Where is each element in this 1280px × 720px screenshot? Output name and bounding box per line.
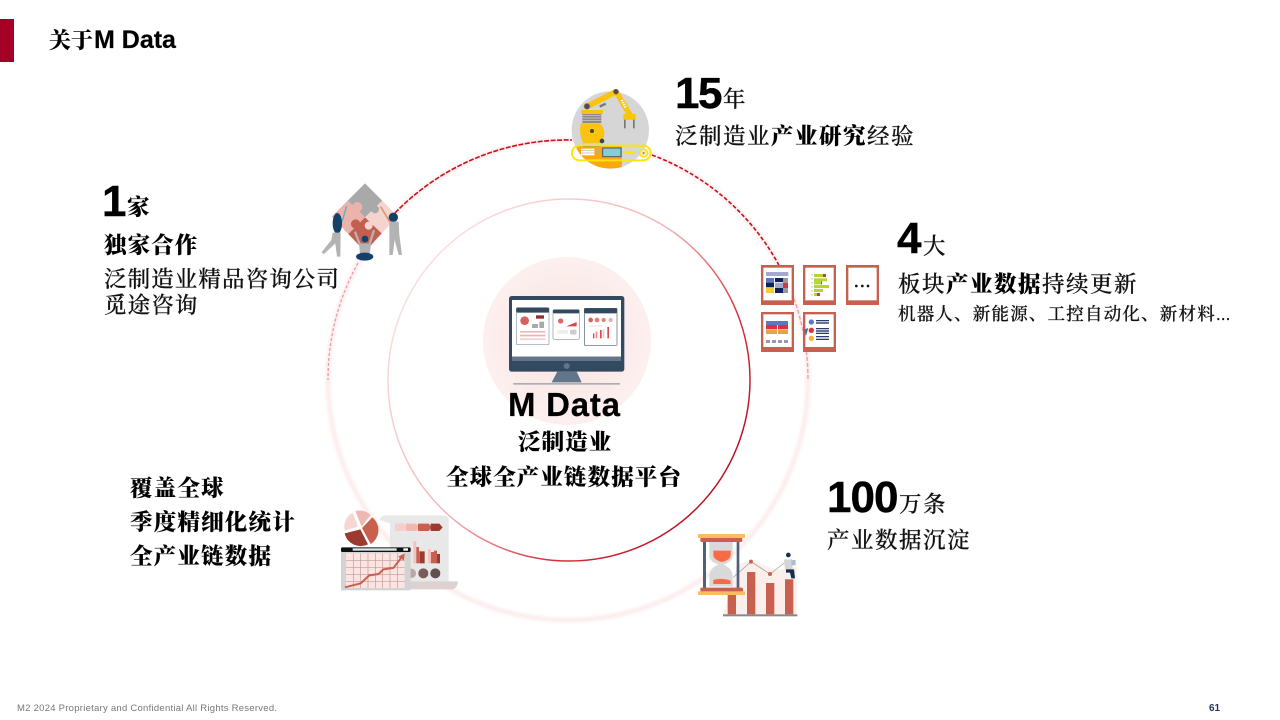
block: 4 sectors: 4 — [897, 214, 922, 263]
center text: 全球全产业链数据平台 — [446, 460, 682, 492]
icon: puzzle team — [321, 183, 402, 261]
icon: robot arm — [572, 89, 651, 172]
block: 1 partner: 独家合作 — [104, 228, 198, 260]
inner ring — [388, 199, 750, 561]
accent bar — [0, 19, 14, 62]
outer ring — [328, 140, 808, 620]
center text: 泛制造业 — [518, 425, 612, 457]
block: 1 partner: 家 — [127, 190, 151, 222]
block: global coverage: 全产业链数据 — [130, 539, 272, 571]
block: 1 million records: 万条 — [899, 487, 947, 519]
block: global coverage: 覆盖全球 — [130, 471, 225, 503]
block: 1 partner: 1 — [102, 177, 126, 226]
block: 1 partner — [102, 177, 340, 320]
block: 15 years: 泛制造业产业研究经验 — [675, 119, 915, 151]
block: 15 years — [675, 69, 915, 151]
title: M Data — [94, 26, 177, 54]
page number: 61 — [1209, 703, 1221, 714]
footer: M2 2024 Proprietary and Confidential All Rights Reserved. — [17, 703, 277, 714]
block: 1 million records: 100 — [827, 473, 897, 522]
title: 关于 — [49, 24, 93, 55]
block: 15 years: 年 — [723, 82, 747, 114]
center text — [446, 386, 682, 492]
block: 1 partner: 觅途咨询 — [104, 288, 198, 320]
block: 1 million records: 产业数据沉淀 — [827, 523, 971, 555]
block: 4 sectors: 板块产业数据持续更新 — [898, 267, 1138, 299]
block: global coverage — [130, 471, 296, 571]
icon: data board cards — [761, 265, 879, 352]
icon: hourglass and bars — [698, 534, 797, 616]
block: 4 sectors: 大 — [923, 229, 947, 261]
block: 15 years: 15 — [675, 69, 722, 118]
block: 4 sectors — [897, 214, 1230, 326]
icon: reports and charts — [341, 510, 458, 590]
block: 4 sectors: 机器人、新能源、工控自动化、新材料... — [898, 301, 1230, 326]
center text: M Data — [508, 386, 621, 423]
icon: monitor — [509, 296, 624, 385]
block: 1 million records — [827, 473, 971, 555]
center halo — [483, 257, 651, 425]
block: global coverage: 季度精细化统计 — [130, 505, 296, 537]
block: 1 partner: 泛制造业精品咨询公司 — [104, 262, 340, 294]
